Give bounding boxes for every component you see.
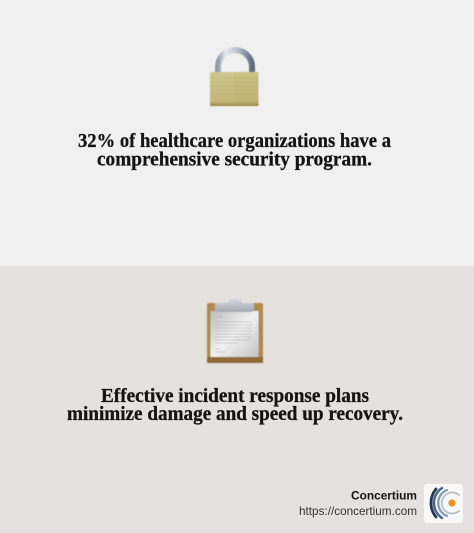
icon: padlock: [210, 50, 258, 106]
heading: incident response statement: Effective incident response plans: [101, 386, 369, 407]
brand name: Concertium: [351, 488, 417, 502]
heading: security statistic: 32% of healthcare organizations have a: [78, 131, 391, 152]
heading: incident response statement: [67, 386, 403, 425]
heading: security statistic: [78, 131, 391, 170]
icon: clipboard: [207, 298, 263, 363]
panel: incident response: [0, 266, 474, 533]
icon: Concertium logo: [424, 484, 463, 523]
heading: incident response statement: minimize damage and speed up recovery.: [67, 404, 403, 425]
brand url: https://concertium.com: [299, 504, 417, 518]
panel: security program: [0, 0, 474, 266]
heading: security statistic: comprehensive security program.: [97, 150, 372, 170]
